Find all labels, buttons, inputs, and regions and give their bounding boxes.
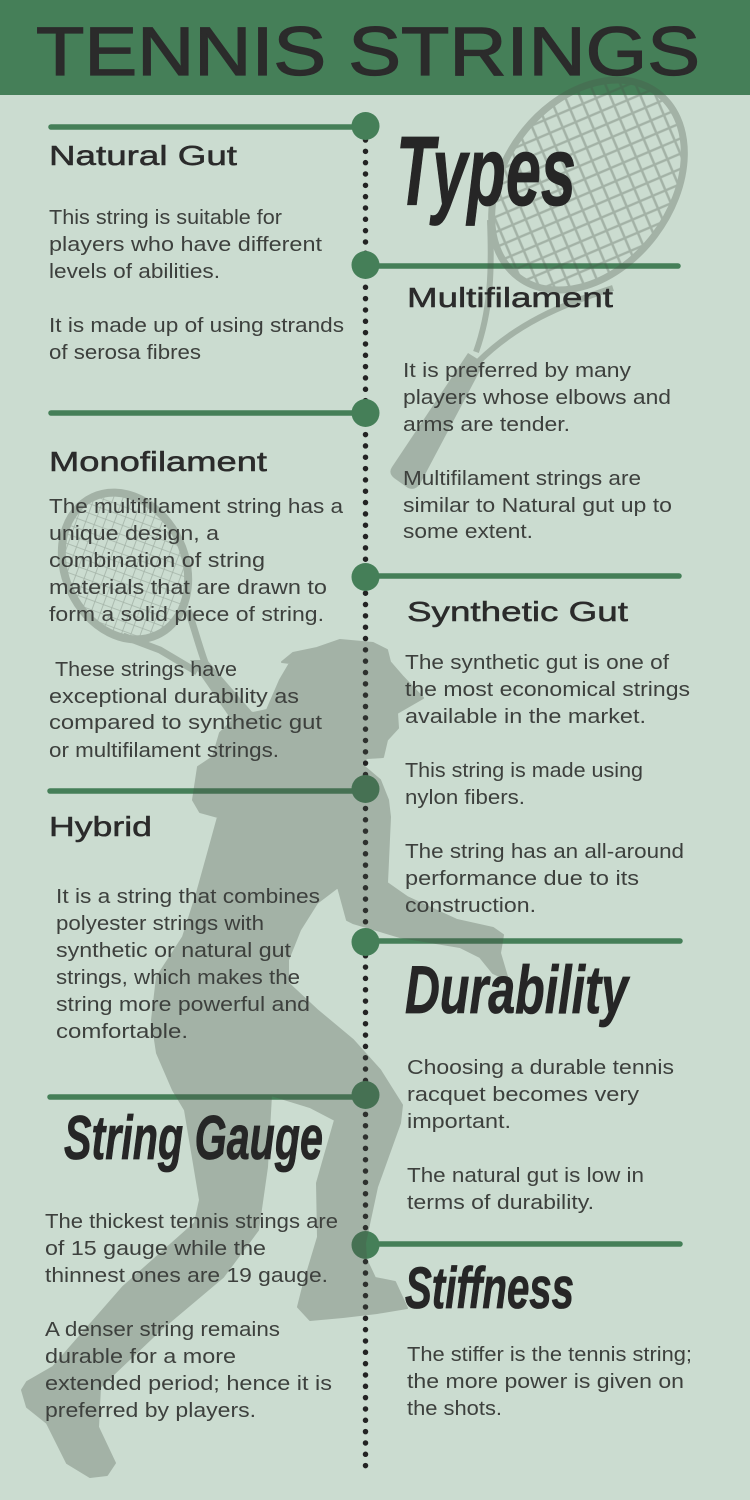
panel: natural gut xyxy=(49,140,344,364)
panel: monofilament: combination of string xyxy=(49,550,265,572)
panel: string gauge: extended period; hence it is xyxy=(45,1373,332,1395)
panel: string gauge: of 15 gauge while the xyxy=(45,1238,266,1260)
panel: monofilament: The multifilament string has a xyxy=(49,496,344,518)
panel: stiffness: Stiffness xyxy=(405,1256,574,1321)
panel: string gauge: The thickest tennis strings are xyxy=(45,1211,338,1233)
panel: synthetic gut: the most economical strings xyxy=(405,679,690,701)
panel: durability xyxy=(405,952,674,1214)
panel: hybrid: string more powerful and xyxy=(56,994,310,1016)
panel: monofilament: unique design, a xyxy=(49,523,220,545)
panel: natural gut: It is made up of using strands xyxy=(49,315,344,337)
panel: hybrid: synthetic or natural gut xyxy=(56,940,292,962)
panel: natural gut: of serosa fibres xyxy=(49,342,201,364)
panel: synthetic gut xyxy=(405,596,690,917)
watermark: large racket xyxy=(390,43,724,489)
panel: synthetic gut: The synthetic gut is one of xyxy=(405,652,669,674)
panel: hybrid: strings, which makes the xyxy=(56,967,300,989)
panel: multifilament: players whose elbows and xyxy=(403,387,671,409)
panel: synthetic gut: Synthetic Gut xyxy=(407,596,628,627)
panel: multifilament: similar to Natural gut up to xyxy=(403,495,672,517)
panel: durability: terms of durability. xyxy=(407,1192,594,1214)
panel: monofilament: compared to synthetic gut xyxy=(49,712,323,734)
panel: monofilament: These strings have xyxy=(55,659,237,681)
panel: multifilament xyxy=(403,282,672,543)
panel: synthetic gut: construction. xyxy=(405,895,536,917)
panel: natural gut: This string is suitable for xyxy=(49,207,282,229)
heading: types: Types xyxy=(396,116,576,226)
panel: durability: The natural gut is low in xyxy=(407,1165,644,1187)
panel: stiffness: The stiffer is the tennis string; xyxy=(407,1344,692,1366)
panel: durability: Durability xyxy=(405,952,630,1028)
panel: hybrid: Hybrid xyxy=(49,811,152,842)
panel: monofilament: materials that are drawn to xyxy=(49,577,327,599)
panel: hybrid: polyester strings with xyxy=(56,913,264,935)
panel: multifilament: some extent. xyxy=(403,521,533,543)
header band xyxy=(0,0,750,95)
title: TENNIS STRINGS xyxy=(36,13,700,90)
panel: monofilament: exceptional durability as xyxy=(49,686,299,708)
panel: hybrid: comfortable. xyxy=(56,1021,188,1043)
panel: synthetic gut: The string has an all-around xyxy=(405,841,684,863)
panel: string gauge: preferred by players. xyxy=(45,1400,256,1422)
panel: stiffness xyxy=(405,1256,692,1420)
watermark: player silhouette with small racket xyxy=(22,472,508,1477)
panel: monofilament: Monofilament xyxy=(49,446,267,477)
panel: hybrid xyxy=(49,811,320,1043)
panel: stiffness: the shots. xyxy=(407,1398,502,1420)
panel: string gauge: thinnest ones are 19 gauge. xyxy=(45,1265,328,1287)
panel: string gauge: durable for a more xyxy=(45,1346,236,1368)
panel: synthetic gut: This string is made using xyxy=(405,760,643,782)
panel: monofilament: form a solid piece of string. xyxy=(49,604,324,626)
panel: hybrid: It is a string that combines xyxy=(56,886,320,908)
timeline xyxy=(50,112,680,1468)
panel: multifilament: Multifilament xyxy=(407,282,613,313)
panel: multifilament: arms are tender. xyxy=(403,414,570,436)
panel: natural gut: levels of abilities. xyxy=(49,261,220,283)
panel: synthetic gut: performance due to its xyxy=(405,868,639,890)
panel: monofilament xyxy=(49,446,344,762)
panel: natural gut: Natural Gut xyxy=(49,140,237,171)
panel: monofilament: or multifilament strings. xyxy=(49,740,279,762)
panel: durability: Choosing a durable tennis xyxy=(407,1057,674,1079)
panel: natural gut: players who have different xyxy=(49,234,323,256)
panel: multifilament: It is preferred by many xyxy=(403,360,631,382)
panel: stiffness: the more power is given on xyxy=(407,1371,684,1393)
panel: string gauge xyxy=(45,1104,338,1422)
panel: durability: racquet becomes very xyxy=(407,1084,639,1106)
panel: synthetic gut: nylon fibers. xyxy=(405,787,525,809)
panel: synthetic gut: available in the market. xyxy=(405,706,646,728)
panel: multifilament: Multifilament strings are xyxy=(403,468,641,490)
panel: string gauge: A denser string remains xyxy=(45,1319,280,1341)
panel: durability: important. xyxy=(407,1111,511,1133)
panel: string gauge: String Gauge xyxy=(64,1104,323,1173)
